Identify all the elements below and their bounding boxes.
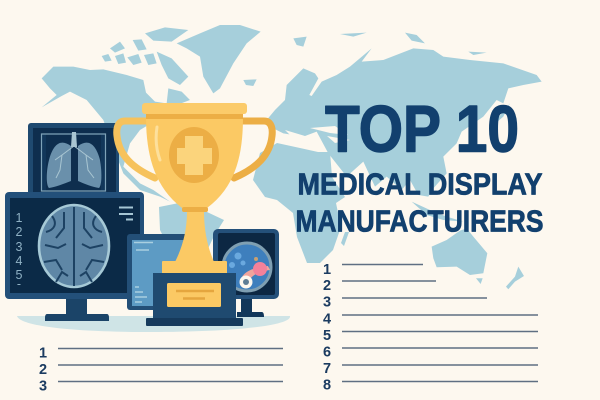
x-ray frame: [42, 134, 106, 191]
trophy stem: [175, 211, 214, 262]
title: top 10: TOP 10: [325, 92, 519, 166]
scale numbers: 3: [16, 240, 23, 254]
monitor stand: [45, 298, 109, 321]
rank numbers: 2: [39, 362, 47, 378]
blank entry lines: [58, 348, 283, 382]
trophy handles: [117, 121, 272, 178]
medallion with medical cross: [169, 127, 219, 183]
trophy rim: [142, 103, 247, 114]
tablet: [127, 234, 197, 310]
rank numbers: 3: [39, 378, 47, 394]
monitor: organ scan: [213, 229, 279, 317]
subtitle: [296, 166, 544, 238]
scale numbers: [16, 211, 23, 291]
scale numbers: 2: [16, 225, 23, 239]
trophy: [117, 103, 272, 326]
monitor: lung x-ray: [28, 123, 119, 195]
rank numbers: 4: [323, 312, 331, 328]
brain: [39, 205, 109, 287]
map: greenland: [177, 25, 261, 93]
rank numbers: 6: [323, 344, 331, 360]
rank numbers: 8: [323, 378, 331, 394]
organ details: [229, 252, 270, 288]
scale numbers: 5: [16, 268, 23, 282]
lungs: [47, 132, 101, 188]
subtitle: MEDICAL DISPLAY: [298, 166, 543, 202]
list: ranks 1 to 8: [323, 262, 538, 394]
menu lines: [119, 208, 133, 220]
map: south america: [159, 202, 224, 270]
rank numbers: 1: [39, 346, 47, 362]
scale numbers: 4: [16, 254, 23, 268]
map: north america: [42, 27, 190, 202]
map: africa: [253, 143, 349, 263]
rank numbers: 7: [323, 361, 331, 377]
monitor: brain scan: [5, 192, 144, 321]
scale numbers: 1: [16, 211, 23, 225]
list: left ranks 1 to 3: [39, 346, 283, 394]
map: australia and new zealand: [432, 228, 524, 289]
rank numbers: 1: [323, 262, 331, 278]
rank numbers: 2: [323, 278, 331, 294]
rank numbers: [323, 262, 331, 394]
map: eurasia: [267, 33, 542, 222]
blank entry lines: [342, 264, 538, 382]
world map background: [42, 25, 542, 289]
pale water highlights on the map: [285, 126, 350, 148]
scale numbers: -: [17, 277, 21, 291]
trophy base: [162, 261, 227, 274]
ground shadow: [17, 316, 290, 332]
trophy cup: [146, 116, 243, 208]
subtitle: MANUFACTUIRERS: [296, 204, 544, 238]
nameplate: [167, 283, 221, 307]
monitor stand: [237, 297, 264, 317]
rank numbers: 5: [323, 328, 331, 344]
rank numbers: [39, 346, 47, 394]
rank numbers: 3: [323, 294, 331, 310]
